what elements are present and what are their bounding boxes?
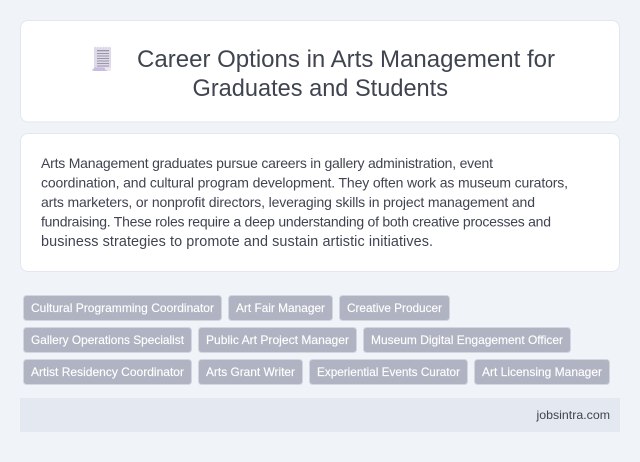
panel: career tags bbox=[24, 296, 610, 384]
tag: Public Art Project Manager: Public Art Project Manager bbox=[206, 333, 349, 347]
tag: Experiential Events Curator: Experiential Events Curator bbox=[317, 365, 460, 379]
text block: description: business strategies to promote and sustain artistic initiatives. bbox=[41, 234, 433, 250]
tag: Creative Producer bbox=[340, 296, 450, 320]
tag: Art Licensing Manager bbox=[474, 360, 610, 384]
tag: Art Licensing Manager: Art Licensing Manager bbox=[482, 365, 602, 379]
tag: Gallery Operations Specialist bbox=[24, 328, 192, 352]
panel: description card bbox=[20, 134, 620, 272]
text block: description: fundraising. These roles require a deep understanding of both creative processes and bbox=[41, 214, 551, 230]
text block: description: Arts Management graduates pursue careers in gallery administration, event bbox=[41, 155, 493, 171]
tag: Gallery Operations Specialist: Gallery Operations Specialist bbox=[31, 333, 185, 347]
text block: description: coordination, and cultural program development. They often work as museum curators, bbox=[41, 174, 568, 190]
footer source text: jobsintra.com bbox=[535, 408, 610, 422]
tag: Experiential Events Curator bbox=[310, 360, 468, 384]
tag: Museum Digital Engagement Officer bbox=[364, 328, 570, 352]
title bbox=[137, 46, 555, 102]
text block: description: arts marketers, or nonprofit directors, leveraging skills in project management and bbox=[41, 194, 535, 210]
title: Career Options in Arts Management for bbox=[137, 46, 555, 73]
tag: Artist Residency Coordinator bbox=[24, 360, 192, 384]
tag: Art Fair Manager bbox=[228, 296, 332, 320]
tag: Art Fair Manager: Art Fair Manager bbox=[236, 301, 325, 315]
panel: footer bbox=[20, 398, 620, 432]
tag: Arts Grant Writer: Arts Grant Writer bbox=[206, 365, 295, 379]
tag: Public Art Project Manager bbox=[198, 328, 356, 352]
tag: Cultural Programming Coordinator: Cultural Programming Coordinator bbox=[31, 301, 214, 315]
tag: Arts Grant Writer bbox=[198, 360, 302, 384]
tag: Artist Residency Coordinator: Artist Residency Coordinator bbox=[31, 365, 184, 379]
icon: paper scroll document bbox=[92, 46, 111, 71]
title: Graduates and Students bbox=[192, 75, 448, 102]
tag: Cultural Programming Coordinator bbox=[24, 296, 222, 320]
text block: description bbox=[41, 155, 568, 250]
tag: Museum Digital Engagement Officer: Museum Digital Engagement Officer bbox=[371, 333, 563, 347]
panel: title card bbox=[20, 20, 620, 122]
tag: Creative Producer: Creative Producer bbox=[347, 301, 442, 315]
